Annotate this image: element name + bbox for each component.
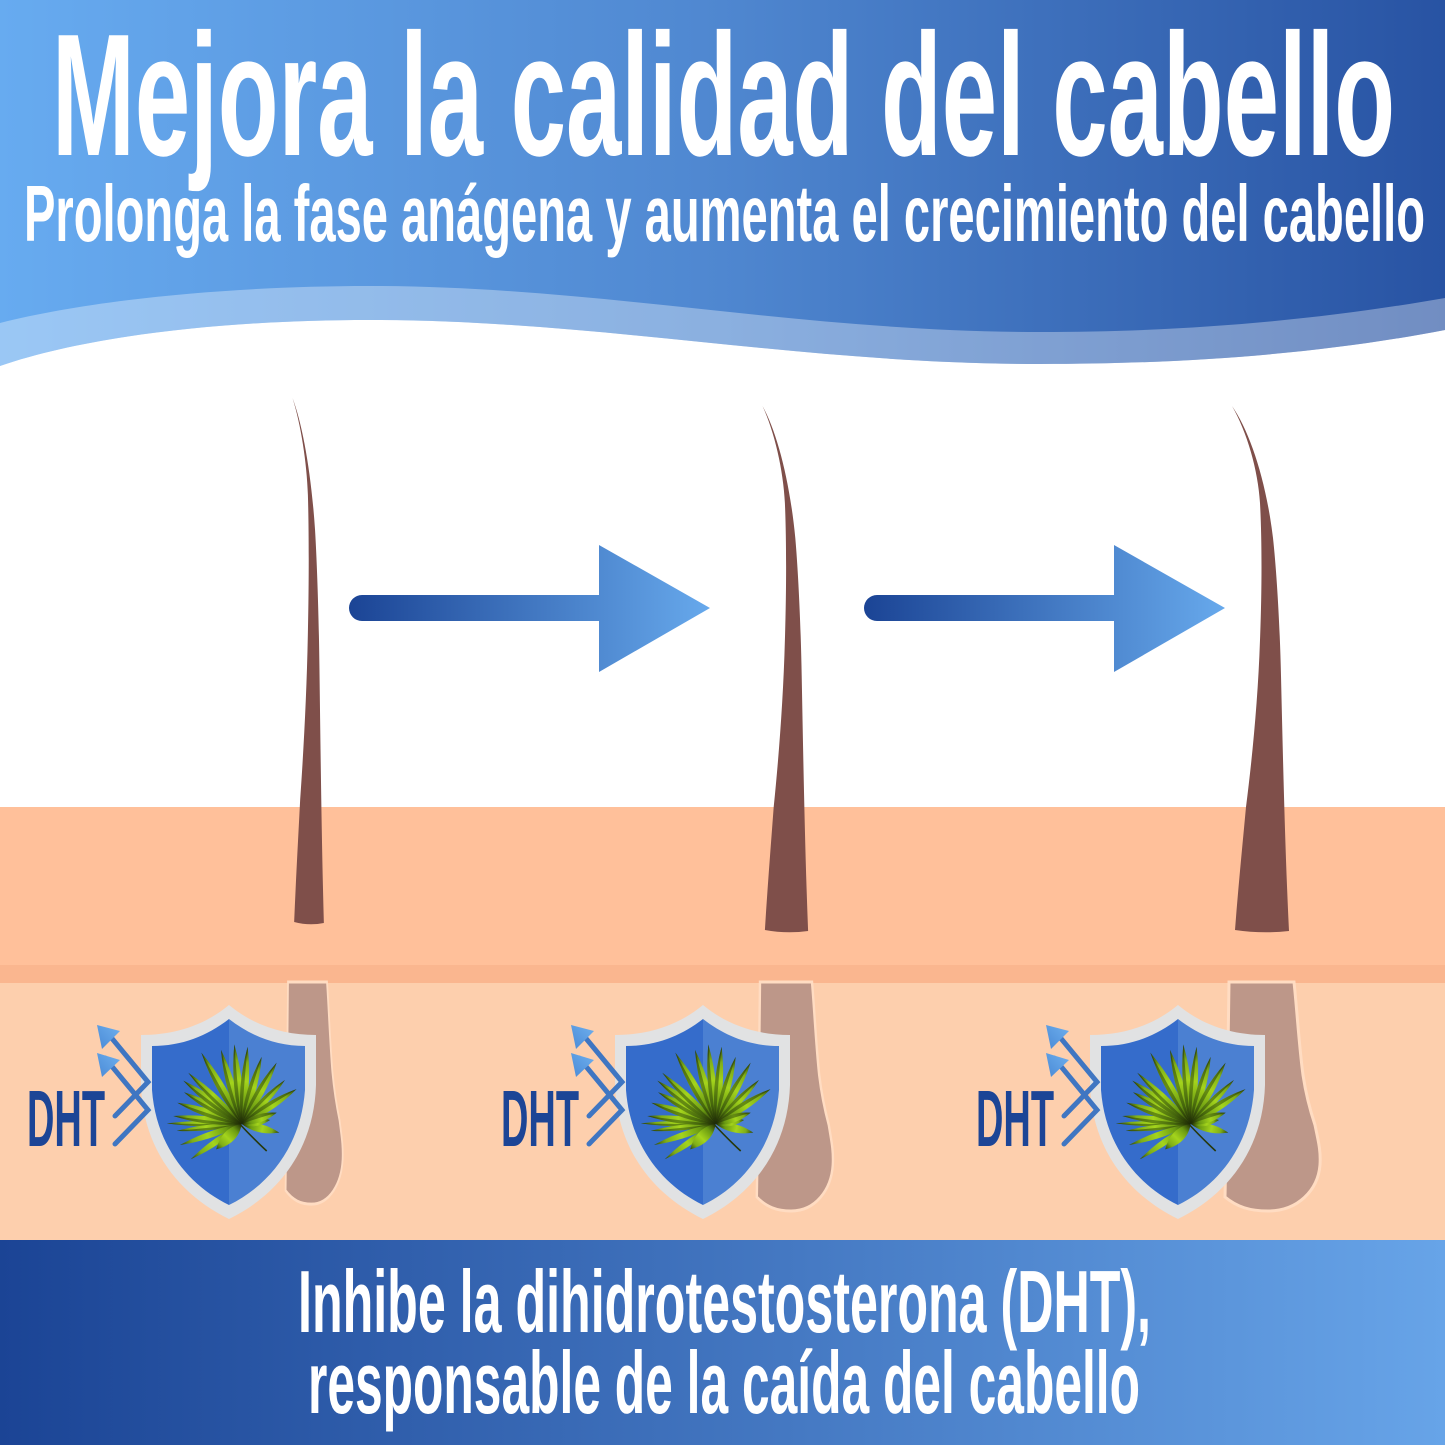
hair strand 2	[762, 406, 808, 932]
hair root 2	[757, 982, 833, 1211]
footer text	[298, 1252, 1151, 1432]
hair strand 1	[292, 398, 324, 924]
skin layers	[0, 807, 1445, 1240]
shield with palm leaf and DHT label 1	[27, 1005, 316, 1219]
shield with palm leaf and DHT label 2	[501, 1005, 790, 1219]
hair root 1	[286, 982, 343, 1204]
shield with palm leaf and DHT label 3	[976, 1005, 1265, 1219]
hair root 3	[1225, 982, 1320, 1211]
hair strand 3	[1232, 406, 1289, 932]
header banner	[0, 0, 1445, 366]
arrow 1	[349, 545, 710, 672]
arrow 2	[864, 545, 1225, 672]
footer banner	[0, 1240, 1445, 1445]
